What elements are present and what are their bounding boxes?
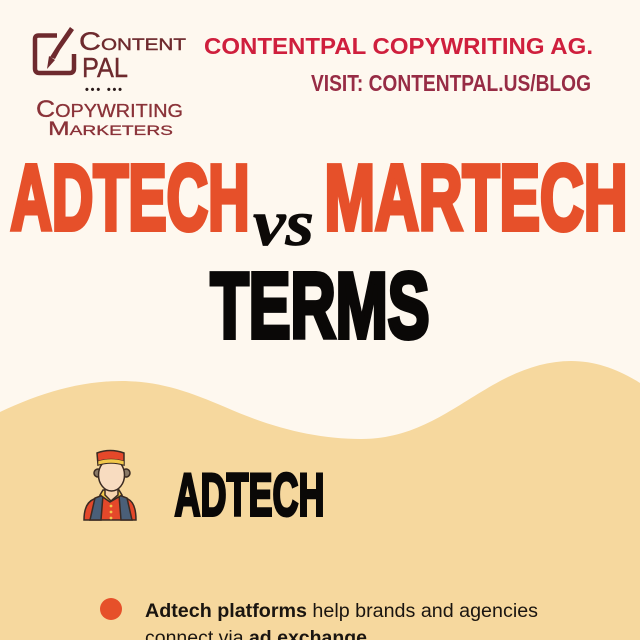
logo tagline: copywriting: COPYWRITING <box>36 96 183 123</box>
bullet text <box>145 601 538 640</box>
title: terms: TERMS <box>210 254 430 358</box>
logo <box>35 27 186 140</box>
icon: pen and bracket <box>35 27 74 73</box>
logo name: content: CONTENT <box>79 28 186 56</box>
logo name: pal: PAL <box>82 52 128 83</box>
wave background panel <box>0 361 640 640</box>
website link: VISIT: CONTENTPAL.US/BLOG <box>311 70 591 96</box>
title: adtech: ADTECH <box>10 146 250 250</box>
company name: CONTENTPAL COPYWRITING AG. <box>204 33 593 59</box>
title: vs: vs <box>253 187 314 260</box>
logo dots: ••• ••• <box>85 84 122 96</box>
logo tagline: marketers: M ARKETERS <box>48 119 173 140</box>
bullet text: Adtech platforms help brands and agencies <box>145 601 538 622</box>
section heading: adtech: ADTECH <box>174 462 324 528</box>
icon: bellhop <box>84 450 136 520</box>
bullet marker <box>100 598 122 620</box>
